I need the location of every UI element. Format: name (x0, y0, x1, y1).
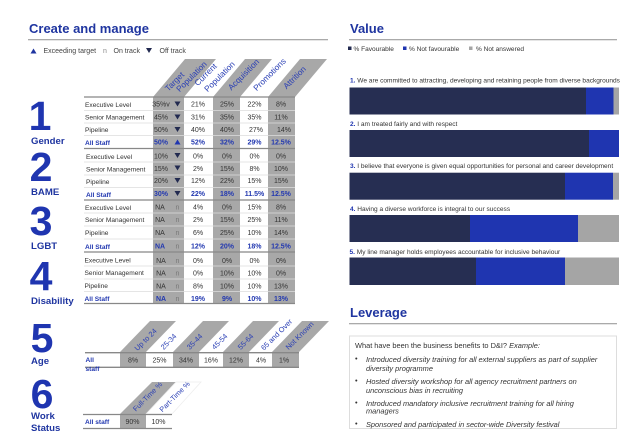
section 3: LGBT: NA (155, 230, 165, 237)
section 3: LGBT: n (176, 204, 180, 212)
section 2: BAME: 15% (274, 178, 288, 185)
section 4: disability: n (176, 258, 180, 265)
section 2: BAME: 8% (249, 166, 260, 173)
section 2: BAME: 18% (220, 191, 235, 198)
section 4: disability: 0% (193, 258, 203, 265)
section 5: age: All (86, 357, 94, 364)
section 4: disability: 10% (247, 270, 262, 278)
section 5: age: 25% (152, 358, 167, 364)
section 4: disability: Pipeline (84, 283, 108, 290)
section 1: gender: 14% (277, 127, 291, 134)
panel: business benefits (350, 336, 616, 429)
section 4: disability: 4 (30, 253, 53, 299)
section 5: age: 34% (179, 358, 193, 364)
section 5: age: 12% (229, 358, 243, 364)
section 3: LGBT: Executive Level (85, 205, 132, 212)
section 3: LGBT: 25% (220, 230, 234, 237)
section 1: gender: Pipeline (85, 127, 109, 134)
section 1: gender: 35% (220, 114, 234, 122)
section 6: work status: All staff (85, 419, 110, 426)
section 3: LGBT: Senior Management (85, 217, 145, 224)
section 4: disability: NA (156, 258, 166, 265)
section 3: LGBT: 25% (247, 217, 262, 224)
section 3: LGBT: 14% (274, 230, 288, 237)
section 1: gender: 32% (220, 140, 235, 146)
table header: diversity columns (153, 56, 327, 97)
section 1: gender: 27% (249, 127, 263, 134)
table row rules (84, 110, 295, 292)
section 4: disability: NA (156, 270, 166, 278)
section 4: disability: 10% (220, 284, 234, 290)
section 2: BAME: 10% (154, 154, 168, 160)
table column bands (153, 97, 295, 303)
legend: survey responses: % Favourable (354, 46, 394, 53)
legend: survey responses (348, 46, 524, 53)
section 5: age: 16% (204, 358, 218, 364)
survey question 2 (350, 121, 619, 157)
section 1: gender: 45% (154, 114, 168, 122)
section 5: age: 55-64 (236, 332, 255, 351)
section 4: disability: 8% (193, 284, 203, 290)
section 1: gender: 35% (247, 114, 262, 122)
legend: target status (30, 48, 186, 55)
table header: diversity columns: Current (192, 61, 219, 88)
section 1: gender: 11% (274, 114, 288, 122)
section 2: BAME: 22% (191, 191, 206, 198)
section 5: age: 25-34 (159, 332, 178, 351)
section 4: disability: 10% (247, 284, 262, 290)
section 1: gender: All Staff (85, 140, 111, 147)
section 3: LGBT: 20% (220, 244, 235, 250)
section 3: LGBT: n (176, 217, 180, 224)
section 5: age: Not Known (284, 320, 316, 352)
section 2: BAME: 15% (220, 166, 234, 173)
section 1: gender: Executive Level (85, 102, 132, 109)
section 2: BAME: 12.5% (271, 191, 292, 198)
panel: business benefits: • (355, 419, 358, 428)
section 5: age: 35-44 (185, 332, 204, 351)
section 4: disability: 0% (276, 258, 286, 265)
section 2: BAME: All Staff (86, 192, 112, 199)
section 6: work status: 6 (31, 371, 53, 417)
section 1: gender (29, 93, 292, 147)
heading: Create and manage: Create and manage (29, 21, 149, 36)
section 2: BAME: 2% (193, 166, 203, 173)
section 4: disability: Senior Management (84, 270, 144, 277)
section 2: BAME: 0% (222, 154, 232, 160)
survey question 1 (350, 78, 621, 114)
panel: business benefits: managers (366, 406, 399, 416)
section 6: work status: 10% (151, 419, 166, 426)
section 1: gender: 12.5% (271, 140, 292, 146)
survey question 3 (350, 163, 619, 200)
section 6: work status: 90% (125, 419, 140, 426)
table header: diversity columns: Acquisition (226, 56, 261, 92)
section 3: LGBT: NA (155, 244, 165, 250)
legend: target status: Off track (160, 48, 186, 55)
section 4: disability: 0% (276, 270, 286, 278)
section 1: gender: 21% (191, 102, 205, 108)
table header: diversity columns: Attrition (281, 64, 308, 91)
section 3: LGBT: 4% (193, 204, 203, 212)
survey question 4 (350, 206, 619, 242)
heading: Leverage: Leverage (350, 305, 407, 320)
section 2: BAME: Pipeline (86, 179, 110, 186)
section 5: age: 1% (279, 358, 289, 364)
section 5: age: 65 and Over (259, 317, 295, 352)
section 5: age: 5 (31, 315, 53, 361)
legend: target status: n (103, 48, 107, 55)
section 1: gender: 31% (191, 114, 205, 122)
section 5: age: 8% (128, 358, 138, 364)
section 1: gender: Gender (31, 136, 65, 147)
panel: business benefits: unconscious bias in recruiting (366, 386, 464, 395)
section 2: BAME: Senior Management (86, 166, 146, 174)
section 1: gender: 25% (220, 102, 234, 108)
section 4: disability: n (176, 284, 180, 290)
section 2: BAME: 0% (193, 154, 203, 160)
section 4: disability: 0% (249, 258, 260, 265)
section 2: BAME: 30% (154, 191, 169, 198)
section 3: LGBT: NA (155, 204, 165, 212)
section 4: disability: 13% (274, 296, 289, 303)
section 2: BAME: Executive Level (86, 154, 133, 161)
section 4: disability: Disability (31, 296, 74, 307)
panel: business benefits: Hosted diversity workshop for all agency recruitment partners on (366, 377, 577, 386)
table header: diversity columns: Promotions (251, 56, 288, 93)
survey question 2: 2. I am treated fairly and with respect (350, 121, 458, 128)
legend: survey responses: % Not answered (476, 46, 524, 53)
section 4: disability: 10% (220, 270, 234, 278)
section 1: gender: 50% (154, 127, 168, 134)
section 4: disability: n (176, 296, 180, 303)
survey question 5 (350, 249, 619, 285)
section 2: BAME: 15% (247, 178, 262, 185)
survey question 4: 4. Having a diverse workforce is integral to our success (350, 206, 511, 213)
section 2: BAME: 2 (30, 144, 52, 190)
section 5: age: 45-54 (210, 332, 229, 351)
section 2: BAME: 11.5% (245, 191, 265, 198)
section 3: LGBT: n (176, 230, 180, 237)
survey question 5: 5. My line manager holds employees accountable for inclusive behaviour (350, 249, 561, 256)
section 3: LGBT (30, 198, 292, 252)
section 3: LGBT: 12% (191, 244, 206, 250)
section 4: disability: n (176, 270, 180, 278)
section 3: LGBT: 15% (220, 217, 234, 224)
section 4: disability (30, 253, 289, 307)
panel: business benefits: What have been the business benefits to D&I? Example: (355, 341, 540, 350)
section 4: disability: Executive Level (84, 258, 131, 264)
section 1: gender: 22% (247, 102, 262, 108)
section 1: gender: 35%v (152, 102, 170, 108)
section 2: BAME: 0% (276, 154, 286, 160)
section 4: disability: NA (156, 296, 166, 303)
section 3: LGBT: 12.5% (271, 244, 292, 250)
section 5: age: 4% (256, 358, 266, 364)
section 3: LGBT: 2% (193, 217, 203, 224)
section 6: work status: Full-Time % (131, 380, 165, 413)
section 3: LGBT: 8% (276, 204, 286, 212)
section 6: work status: Part-Time % (157, 379, 192, 414)
panel: business benefits: Introduced diversity training for all external suppliers as part of supplier (366, 355, 598, 364)
section 5: age: Age (31, 356, 49, 367)
section 1: gender: Senior Management (85, 114, 145, 122)
legend: target status: On track (114, 48, 140, 55)
section 3: LGBT: Pipeline (85, 230, 109, 237)
section 1: gender: 50% (154, 140, 169, 146)
section 4: disability: NA (156, 284, 166, 290)
panel: business benefits: Introduced mandatory inclusive recruitment training for all hiring (366, 399, 575, 408)
section 4: disability: 13% (274, 284, 288, 290)
section 3: LGBT: n (176, 244, 180, 250)
panel: business benefits: Sponsored and participated in sector-wide Diversity festival (366, 420, 560, 429)
heading: Value: Value (350, 21, 384, 36)
section 3: LGBT: 11% (274, 217, 288, 224)
section 3: LGBT: LGBT (31, 241, 57, 252)
section 4: disability: 9% (222, 296, 233, 303)
section 5: age: Up to 24 (133, 327, 159, 353)
section 1: gender: 40% (191, 127, 205, 134)
section 5: age (31, 315, 329, 373)
panel: business benefits: • (355, 376, 358, 385)
section 4: disability: 0% (222, 258, 232, 265)
section 4: disability: All Staff (84, 296, 110, 303)
section 6: work status (31, 371, 201, 434)
table header: diversity columns: Population (174, 59, 209, 94)
section 3: LGBT: 6% (193, 230, 203, 237)
section 2: BAME: 12% (191, 178, 205, 185)
section 1: gender: 52% (191, 140, 206, 146)
section 3: LGBT: NA (155, 217, 165, 224)
section 3: LGBT: 3 (30, 198, 52, 244)
section 2: BAME: BAME (31, 187, 60, 198)
section 1: gender: 29% (247, 140, 262, 146)
legend: target status: Exceeding target (44, 48, 96, 55)
section 2: BAME: 0% (249, 154, 260, 160)
table header: diversity columns: Target (163, 69, 187, 93)
legend: survey responses: % Not favourable (409, 46, 460, 53)
section 1: gender: 1 (29, 93, 51, 139)
section 1: gender: 40% (220, 127, 234, 134)
section 2: BAME: 10% (274, 166, 288, 173)
section 3: LGBT: 18% (247, 244, 262, 250)
section 2: BAME: 15% (154, 166, 168, 173)
section 2: BAME: 20% (154, 178, 168, 185)
section 4: disability: 0% (193, 270, 203, 278)
panel: business benefits: diversity programme (366, 364, 433, 373)
section 3: LGBT: 10% (247, 230, 262, 237)
panel: business benefits: • (355, 398, 358, 407)
section 3: LGBT: 0% (222, 204, 232, 212)
panel: business benefits: • (355, 354, 358, 363)
section 6: work status: Work (31, 411, 55, 422)
section 2: BAME: 22% (220, 178, 234, 185)
table header: diversity columns: Population (202, 59, 237, 94)
section 6: work status: Status (31, 423, 60, 434)
section 4: disability: 10% (247, 296, 262, 303)
section 3: LGBT: All Staff (85, 244, 111, 251)
survey question 3: 3. I believe that everyone is given equal opportunities for personal and career development (350, 163, 613, 170)
survey question 1: 1. We are committed to attracting, developing and retaining people from diverse backgrounds (350, 78, 621, 84)
section 4: disability: 19% (191, 296, 206, 303)
section 2: BAME (30, 144, 292, 199)
section 3: LGBT: 15% (247, 204, 262, 212)
section 5: age: staff (86, 366, 100, 373)
section 1: gender: 8% (276, 102, 286, 108)
